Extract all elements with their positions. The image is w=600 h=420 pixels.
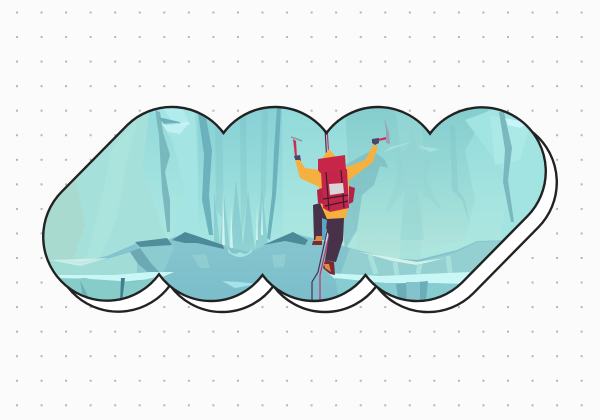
boots xyxy=(312,236,335,275)
right ice axe xyxy=(372,118,390,145)
cliff face and ledge xyxy=(50,232,502,300)
ice wall backdrop xyxy=(44,108,545,262)
climber shadow xyxy=(340,150,388,250)
ice cracks xyxy=(155,110,530,232)
offset shadow outline xyxy=(54,118,557,312)
backpack xyxy=(317,155,355,212)
climber xyxy=(291,118,390,275)
legs xyxy=(313,203,344,262)
ice climbing scene clipped to blob xyxy=(44,108,545,300)
bright frozen shelves xyxy=(58,272,470,300)
main blob outline xyxy=(43,107,546,301)
ghost figure in the ice xyxy=(384,142,440,240)
jacket xyxy=(295,145,378,220)
ropes xyxy=(311,132,329,300)
frozen waterfall xyxy=(198,107,283,252)
left ice axe xyxy=(291,137,302,162)
